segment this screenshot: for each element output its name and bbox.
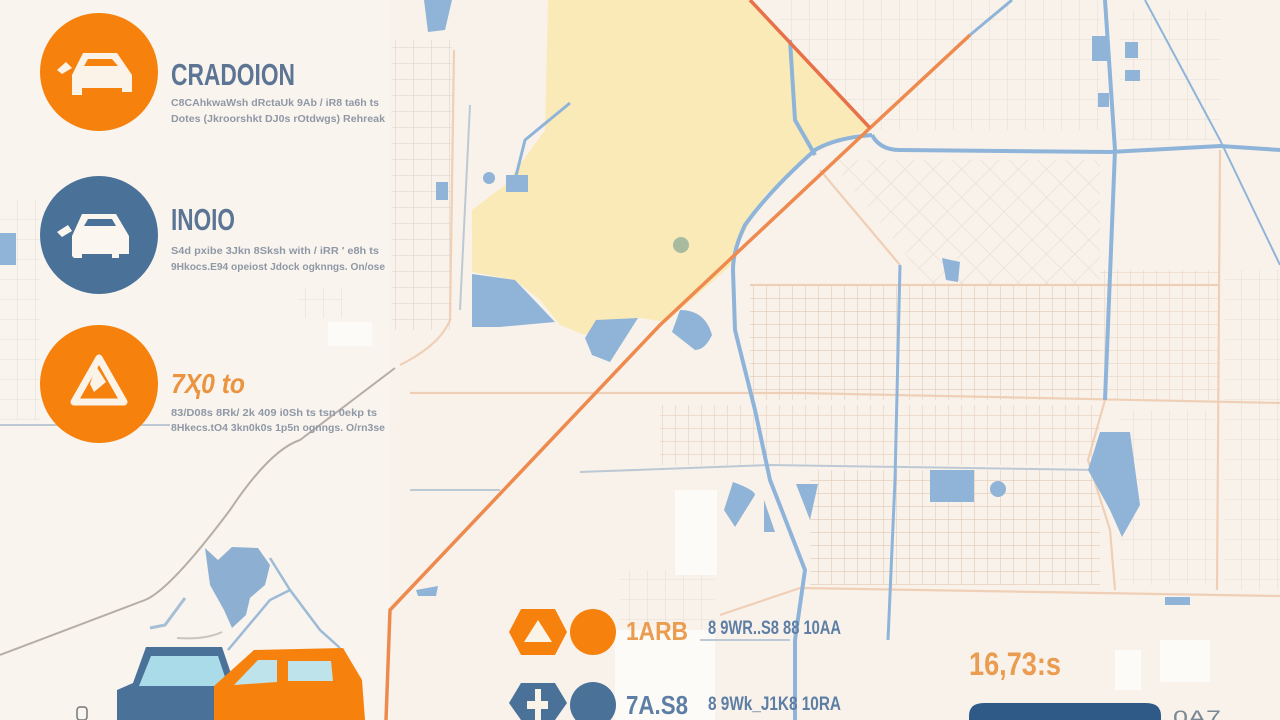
gray-blue secondary roads: [0, 105, 1100, 640]
stat value: 16,73:s: [969, 646, 1061, 682]
icon: blue dot: [570, 682, 616, 720]
description: 83/D08s 8Rk/ 2k 409 i0Sh ts tsn 0ekp ts: [171, 407, 377, 419]
description: 8Hkecs.tO4 3kn0k0s 1p5n ognngs. O/rn3se: [171, 422, 385, 434]
description: C8CAhkwaWsh dRctaUk 9Ab / iR8 ta6h ts: [171, 97, 379, 109]
item 1: crash: [40, 13, 385, 131]
orange car: [214, 648, 365, 720]
legend row 2: [509, 682, 841, 720]
description: [171, 97, 385, 125]
icon: orange circle with car: [40, 13, 158, 131]
description: [171, 245, 385, 273]
left pale panel: [0, 0, 390, 720]
label text: 8 9Wk_J1K8 10RA: [708, 694, 841, 715]
gray highway: [0, 368, 395, 655]
blue roads: [515, 0, 1280, 720]
icon: orange dot: [570, 609, 616, 655]
label text: 8 9WR..S8 88 10AA: [708, 618, 841, 639]
icon: figure: [527, 689, 548, 720]
orange diagonal route: [386, 35, 970, 720]
heading: CRADOION: [171, 57, 295, 92]
icon: orange circle with triangle: [40, 325, 158, 443]
item 3: hazard: [40, 325, 385, 443]
label value: 1ARB: [626, 616, 688, 646]
orange car windows: [234, 660, 277, 685]
red route: [750, 0, 870, 128]
smoke plume: [150, 547, 340, 650]
icon: orange hexagon: [509, 609, 567, 655]
small marker: [77, 707, 87, 720]
illustration: crashed cars and smoke: [77, 547, 365, 720]
white blocks: [328, 322, 1210, 720]
legend row 1: [509, 609, 841, 655]
stat bar: [969, 703, 1161, 720]
description: 9Hkocs.E94 opeiost Jdock ogknngs. On/ose: [171, 261, 385, 273]
blue car window: [139, 656, 228, 686]
stat block: [969, 646, 1221, 720]
lakes: [0, 0, 1190, 605]
icon: triangle: [524, 620, 552, 642]
description: Dotes (Jkroorshkt DJ0s rOtdwgs) Rehreak: [171, 113, 385, 125]
tan secondary roads: [400, 50, 1280, 615]
label value: 7A.S8: [626, 690, 688, 720]
icon: blue circle with car: [40, 176, 158, 294]
heading: 7Ҳ0 to: [171, 368, 245, 399]
yellow district: [472, 0, 870, 335]
heading: INOIO: [171, 202, 235, 237]
description: [171, 407, 385, 434]
icon: blue hexagon: [509, 683, 567, 720]
item 2: injury: [40, 176, 385, 294]
blue car: [117, 647, 240, 720]
description: S4d pxibe 3Jkn 8Sksh with / iRR ' e8h ts: [171, 245, 379, 257]
